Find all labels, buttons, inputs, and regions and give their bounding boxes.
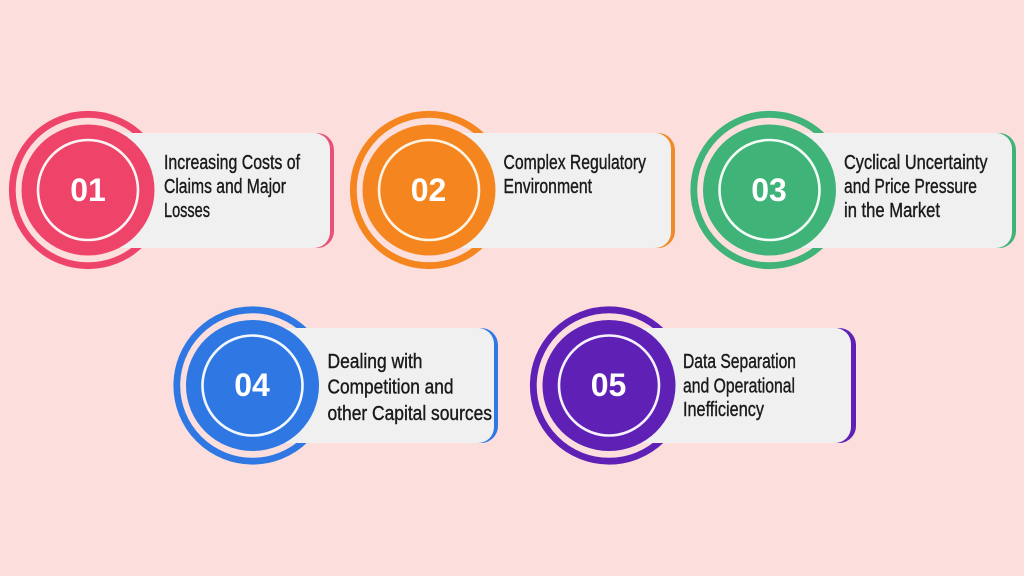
panel: 02 Complex Regulatory Environment: Complex Regulatory: [504, 151, 647, 174]
panel: 01 Increasing Costs of Claims and Major Losses: 01: [70, 172, 106, 208]
panel: 04 Dealing with Competition and other Capital sources: Competition and: [328, 376, 454, 398]
panel: 03 Cyclical Uncertainty and Price Pressure in the Market: in the Market: [844, 199, 940, 222]
panel: 04 Dealing with Competition and other Capital sources: Dealing with: [328, 350, 422, 373]
panel: 02 Complex Regulatory Environment: 02: [411, 172, 446, 208]
panel: 05 Data Separation and Operational Inefficiency: [533, 310, 856, 461]
panel: 03 Cyclical Uncertainty and Price Pressure in the Market: Cyclical Uncertainty: [844, 151, 988, 174]
panel: 01 Increasing Costs of Claims and Major Losses: Claims and Major: [164, 175, 286, 198]
panel: 02 Complex Regulatory Environment: Environment: [504, 175, 592, 198]
panel: 03 Cyclical Uncertainty and Price Pressure in the Market: 03: [751, 172, 787, 208]
panel: 03 Cyclical Uncertainty and Price Pressure in the Market: [694, 114, 1016, 266]
panel: 04 Dealing with Competition and other Capital sources: 04: [234, 367, 270, 403]
panel: 04 Dealing with Competition and other Capital sources: other Capital sources: [328, 402, 492, 425]
panel: 03 Cyclical Uncertainty and Price Pressure in the Market: and Price Pressure: [844, 175, 977, 198]
panel: 04 Dealing with Competition and other Capital sources: [177, 310, 498, 461]
panel: 05 Data Separation and Operational Inefficiency: 05: [591, 367, 626, 403]
panel: 05 Data Separation and Operational Inefficiency: Inefficiency: [683, 398, 765, 421]
panel: 05 Data Separation and Operational Inefficiency: Data Separation: [683, 350, 796, 373]
panel: 01 Increasing Costs of Claims and Major Losses: [12, 114, 334, 266]
panel: 01 Increasing Costs of Claims and Major Losses: Increasing Costs of: [164, 151, 300, 174]
panel: 01 Increasing Costs of Claims and Major Losses: Losses: [164, 199, 210, 222]
panel: 05 Data Separation and Operational Inefficiency: and Operational: [683, 374, 795, 398]
panel: 02 Complex Regulatory Environment: [353, 114, 675, 266]
